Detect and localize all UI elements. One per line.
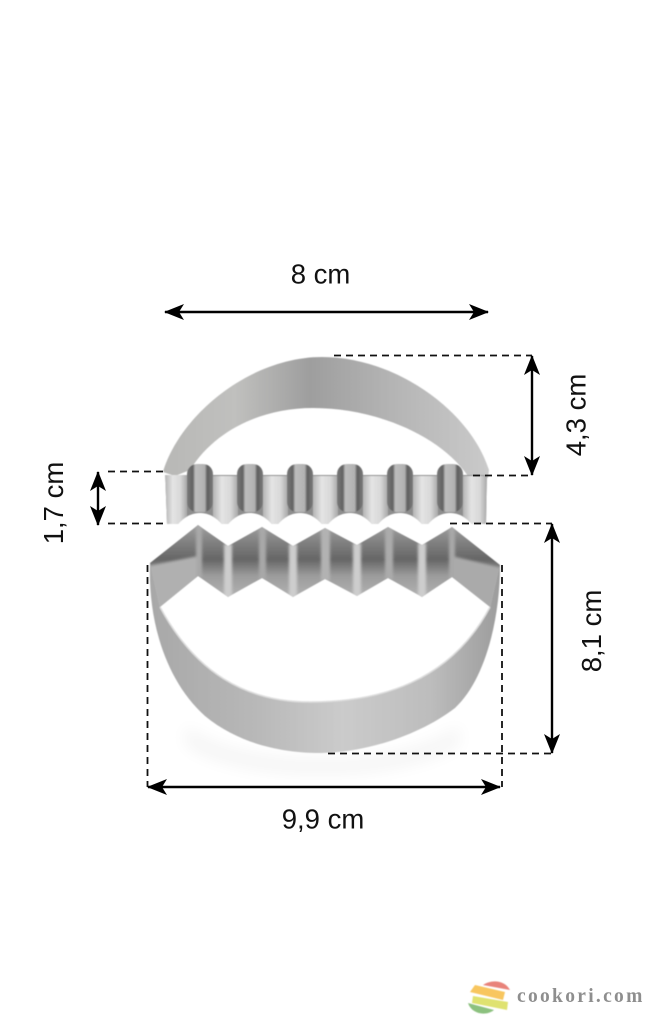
arc band [163,357,489,478]
logo text: cookori.com [517,986,645,1007]
soft shadow [185,725,460,775]
ring band [150,563,500,753]
ring inner rim highlight [160,607,490,702]
arrow: 8,1 cm height [551,524,553,753]
arrow: 8 cm width [165,311,488,313]
fluted strip [165,464,487,525]
label: 4,3 cm: 4,3 cm [560,374,592,456]
label: 8,1 cm: 8,1 cm [576,590,607,672]
logo icon [468,981,510,1014]
photo: top half of cutter (arc with fluted edge) [163,357,489,525]
label: 9,9 cm: 9,9 cm [282,804,364,834]
zigzag ribs and end facets [150,526,500,606]
arrow: 4,3 cm height [531,356,533,475]
label: 8 cm: 8 cm [291,258,350,290]
logo: cookori.com [468,981,645,1014]
arrow: 9,9 cm width [148,786,500,788]
dimension dashed guides [108,356,552,787]
arrow: 1,7 cm height [97,472,99,525]
zigzag wall [150,525,500,607]
label: 1,7 cm: 1,7 cm [38,462,69,544]
photo: bottom half of cutter (ring with zigzag edge) [149,524,500,754]
